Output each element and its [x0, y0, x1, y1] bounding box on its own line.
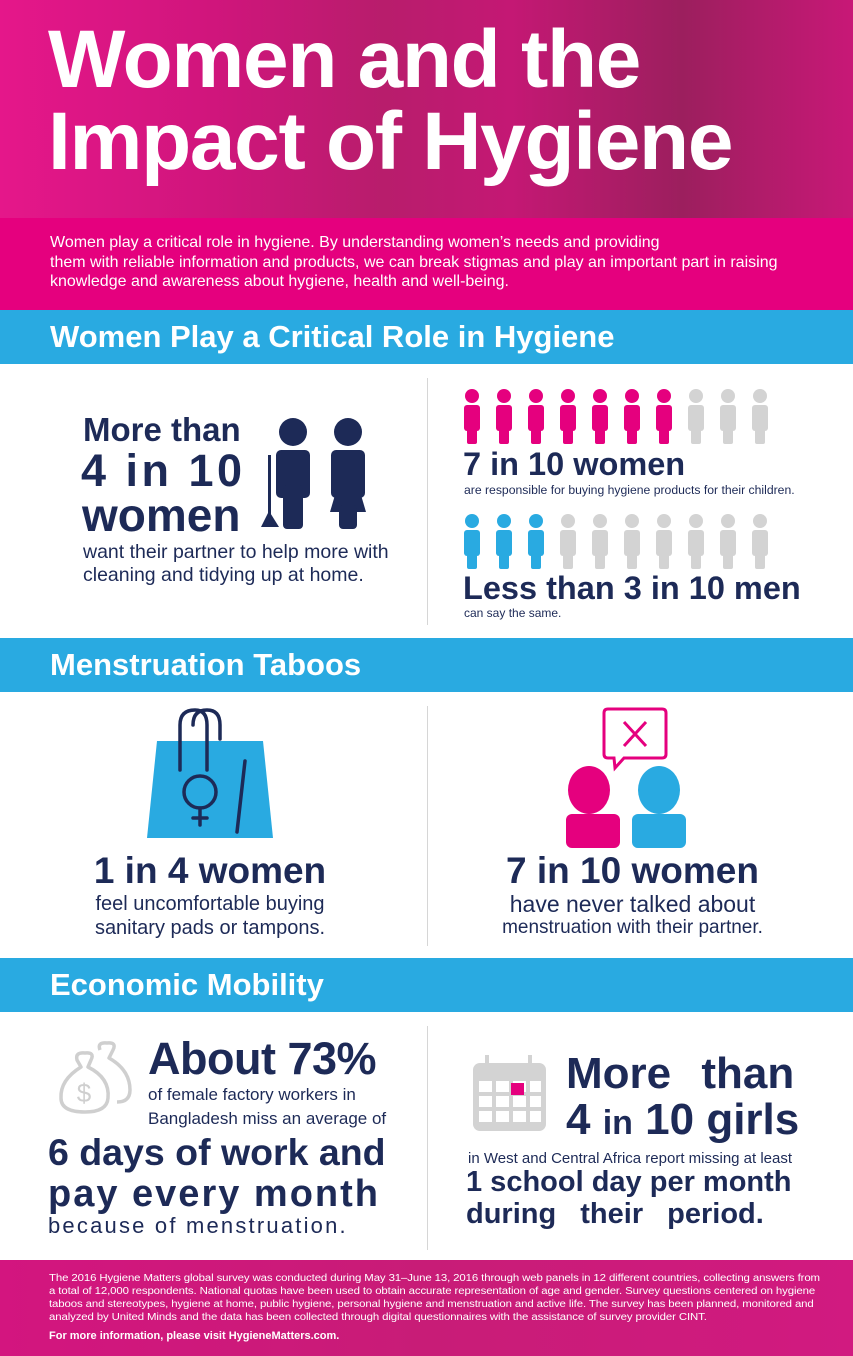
- footer text: The 2016 Hygiene Matters global survey was conducted during May 31–June 13, 2016 through web panels in 12 different countries, collecting answers from: [49, 1273, 820, 1284]
- panel: 4 in 10 girls: in West and Central Africa report missing at least: [468, 1150, 792, 1167]
- intro text: them with reliable information and products, we can break stigmas and play an important part in raising: [50, 254, 777, 270]
- title: [48, 14, 732, 187]
- icon: money bags: [59, 1041, 132, 1114]
- header photo background: [0, 0, 853, 218]
- panel: 4 in 10 girls: during their period.: [466, 1198, 764, 1230]
- panel: 4 in 10 girls: [466, 1049, 799, 1230]
- pictogram: women row: [464, 389, 768, 444]
- stat heading: More than: [83, 411, 241, 448]
- panel: about 73%: About 73%: [148, 1033, 376, 1084]
- panel: 1 in 4 women: [94, 850, 326, 939]
- panel: 7 in 10 women never talked: [502, 850, 763, 938]
- section heading: menstruation taboos: [0, 638, 853, 692]
- stat body: [83, 541, 389, 586]
- footer text: [49, 1273, 820, 1323]
- panel: about 73%: 6 days of work and: [48, 1131, 386, 1173]
- footer text: a total of 12,000 respondents. National quotas have been used to obtain accurate representation of age and gender. Survey questions centered on hygiene: [49, 1286, 815, 1297]
- footer: For more information, please visit HygieneMatters.com.: [49, 1330, 339, 1342]
- footer text: analyzed by United Minds and the data has been collected through digital questionnaires with the assistance of survey provider CINT.: [49, 1312, 707, 1323]
- panel: 1 in 4 women: feel uncomfortable buying: [95, 893, 325, 915]
- panel: 1 in 4 women: 1 in 4 women: [94, 850, 326, 891]
- intro text: knowledge and awareness about hygiene, health and well-being.: [50, 273, 509, 290]
- panel: pictogram chart: [463, 389, 801, 620]
- section heading: critical role: [0, 310, 853, 364]
- section heading: economic mobility: Economic Mobility: [50, 967, 324, 1002]
- panel: 4 in 10 girls: 4 in 10 girls: [566, 1095, 799, 1144]
- panel: 7 in 10 women never talked: have never talked about: [510, 891, 755, 917]
- footer text: taboos and stereotypes, hygiene at home, public hygiene, personal hygiene and menstruation and active life. The survey has been planned, monitored and: [49, 1299, 814, 1310]
- panel: 7 in 10 women never talked: 7 in 10 women: [506, 850, 759, 891]
- stat body: want their partner to help more with: [83, 541, 389, 563]
- title: Impact of Hygiene: [48, 96, 732, 187]
- stat: less than 3 in 10 men: Less than 3 in 10 men: [463, 570, 801, 606]
- stat: 7 in 10 women: 7 in 10 women: [463, 446, 685, 482]
- panel: 4 in 10 women: 4 in 10: [81, 445, 246, 496]
- panel: about 73%: because of menstruation.: [48, 1213, 348, 1238]
- icon: calendar: [473, 1055, 546, 1131]
- panel: pictogram chart: can say the same.: [464, 606, 561, 620]
- panel: 4 in 10 girls: More than: [566, 1049, 794, 1098]
- panel: 4 in 10 women: women: [82, 489, 240, 541]
- panel: pictogram chart: are responsible for buying hygiene products for their children.: [464, 483, 795, 497]
- section heading: menstruation taboos: Menstruation Taboos: [50, 647, 361, 682]
- intro text: [50, 234, 777, 290]
- pictogram: men row: [464, 514, 768, 569]
- panel: about 73%: pay every month: [48, 1173, 380, 1215]
- panel: 4 in 10 girls: 1 school day per month: [466, 1166, 792, 1198]
- intro text: Women play a critical role in hygiene. By understanding women’s needs and providing: [50, 234, 660, 251]
- panel: 4 in 10 women: [81, 411, 389, 586]
- section heading: critical role: Women Play a Critical Role in Hygiene: [50, 319, 614, 354]
- section heading: economic mobility: [0, 958, 853, 1012]
- stat body: cleaning and tidying up at home.: [83, 564, 364, 586]
- intro band: [0, 218, 853, 310]
- title: Women and the: [48, 14, 640, 105]
- panel: 1 in 4 women: sanitary pads or tampons.: [95, 917, 325, 939]
- icon: money bags: $: [77, 1078, 92, 1108]
- icon: couple with crossed speech bubble: [566, 708, 686, 848]
- panel: about 73%: [48, 1033, 386, 1238]
- icon: shopping bag: [147, 708, 273, 838]
- panel: about 73%: of female factory workers in: [148, 1085, 356, 1104]
- footer: [0, 1260, 853, 1356]
- panel: about 73%: Bangladesh miss an average of: [148, 1109, 386, 1128]
- icon: couple with broom: [261, 418, 366, 529]
- panel: 7 in 10 women never talked: menstruation with their partner.: [502, 917, 763, 938]
